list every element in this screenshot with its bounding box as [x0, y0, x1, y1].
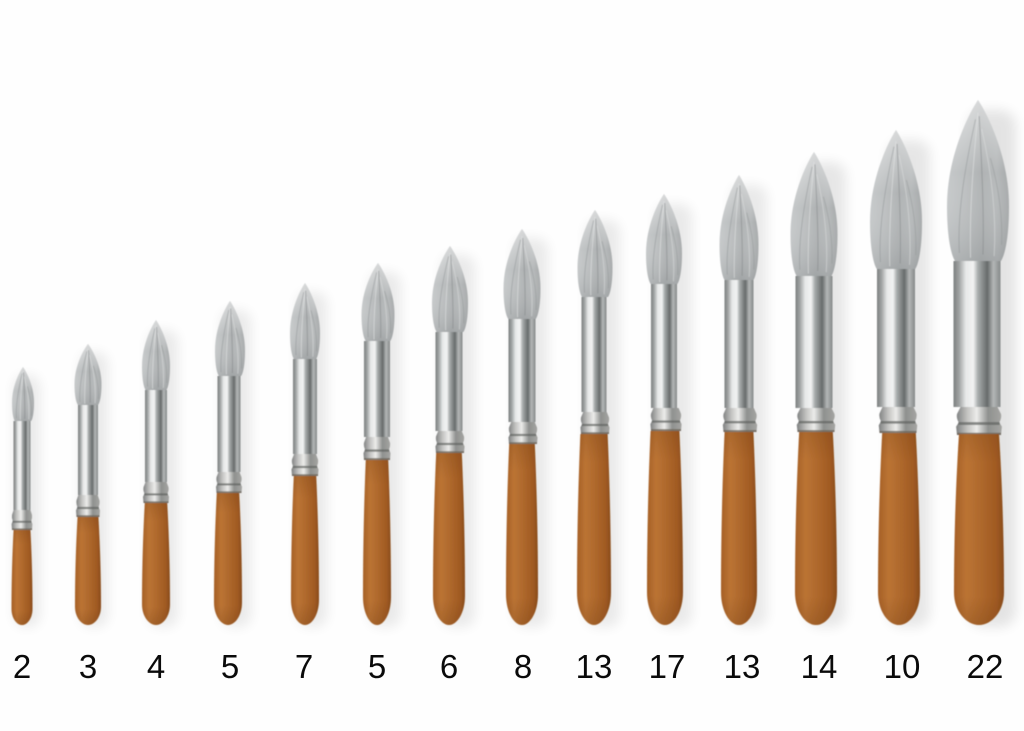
size labels: 8	[514, 648, 532, 685]
size labels: 13	[724, 648, 760, 685]
size labels: 10	[884, 648, 920, 685]
brush size 10	[870, 130, 930, 627]
brush size 2	[12, 367, 40, 627]
size labels: 22	[967, 648, 1003, 685]
brush size 22	[947, 100, 1016, 627]
size labels: 17	[649, 648, 685, 685]
brush size 14	[790, 152, 846, 627]
brush size 8	[504, 229, 548, 627]
size labels: 5	[221, 648, 239, 685]
size labels	[13, 648, 1003, 685]
size labels: 5	[368, 648, 386, 685]
size labels: 14	[801, 648, 837, 685]
size labels: 7	[295, 648, 313, 685]
size labels: 6	[440, 648, 458, 685]
brush size 4	[142, 320, 178, 627]
size labels: 3	[79, 648, 97, 685]
brush size 13 second	[720, 175, 767, 627]
brush size 6	[432, 246, 475, 627]
brush size 5 second	[362, 263, 401, 627]
brush size 7	[290, 283, 327, 627]
brush size 3	[74, 344, 108, 627]
brush size 17	[646, 194, 692, 627]
size labels: 2	[13, 648, 31, 685]
size labels: 4	[147, 648, 165, 685]
size labels: 13	[576, 648, 612, 685]
brush size 13	[577, 210, 620, 627]
brush size 5	[214, 301, 251, 627]
